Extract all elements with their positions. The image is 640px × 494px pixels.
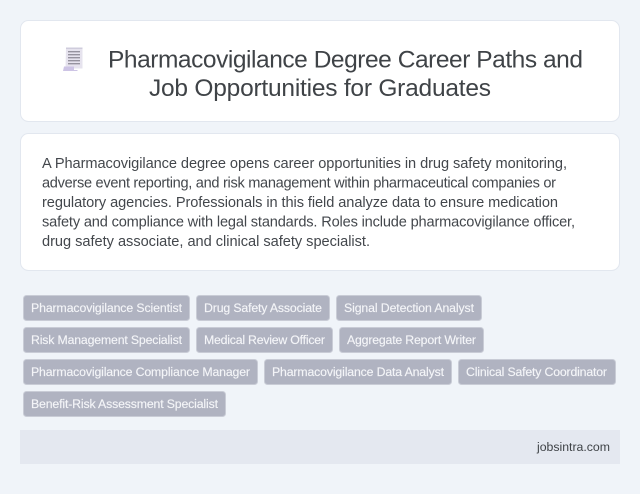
- tag: Pharmacovigilance Compliance Manager: [31, 365, 250, 379]
- title: Job Opportunities for Graduates: [149, 75, 491, 102]
- description text: regulatory agencies. Professionals in this field analyze data to ensure medication: [42, 195, 558, 211]
- icon: document scroll: [63, 48, 82, 71]
- description text: A Pharmacovigilance degree opens career opportunities in drug safety monitoring,: [42, 156, 567, 172]
- tag: Clinical Safety Coordinator: [466, 365, 607, 379]
- tag: [24, 328, 190, 352]
- tag: Signal Detection Analyst: [344, 301, 475, 315]
- tag: [24, 360, 258, 384]
- description text: adverse event reporting, and risk management within pharmaceutical companies or: [42, 176, 556, 192]
- panel: title card: [20, 20, 620, 122]
- tag: Risk Management Specialist: [31, 333, 183, 347]
- tag: [24, 392, 226, 416]
- tag: [336, 296, 482, 320]
- panel: description: [20, 134, 620, 270]
- footer source text: jobsintra.com: [536, 440, 610, 454]
- tag: [458, 360, 616, 384]
- tag: [196, 328, 332, 352]
- footer bar: [20, 430, 620, 464]
- description text: [42, 156, 575, 250]
- title: Pharmacovigilance Degree Career Paths and: [108, 46, 583, 74]
- tag: [264, 360, 452, 384]
- description text: safety and compliance with legal standards. Roles include pharmacovigilance officer,: [42, 214, 575, 230]
- description text: drug safety associate, and clinical safety specialist.: [42, 234, 370, 250]
- tag: Benefit-Risk Assessment Specialist: [31, 397, 219, 411]
- tag: Pharmacovigilance Data Analyst: [272, 365, 445, 379]
- tag: [340, 328, 484, 352]
- tag: Pharmacovigilance Scientist: [31, 301, 183, 315]
- tag: Aggregate Report Writer: [347, 333, 476, 347]
- tag: Medical Review Officer: [204, 333, 325, 347]
- title: [108, 46, 583, 102]
- tag: Drug Safety Associate: [204, 301, 322, 315]
- career tags: [24, 296, 616, 416]
- tag: [196, 296, 330, 320]
- tag: [24, 296, 190, 320]
